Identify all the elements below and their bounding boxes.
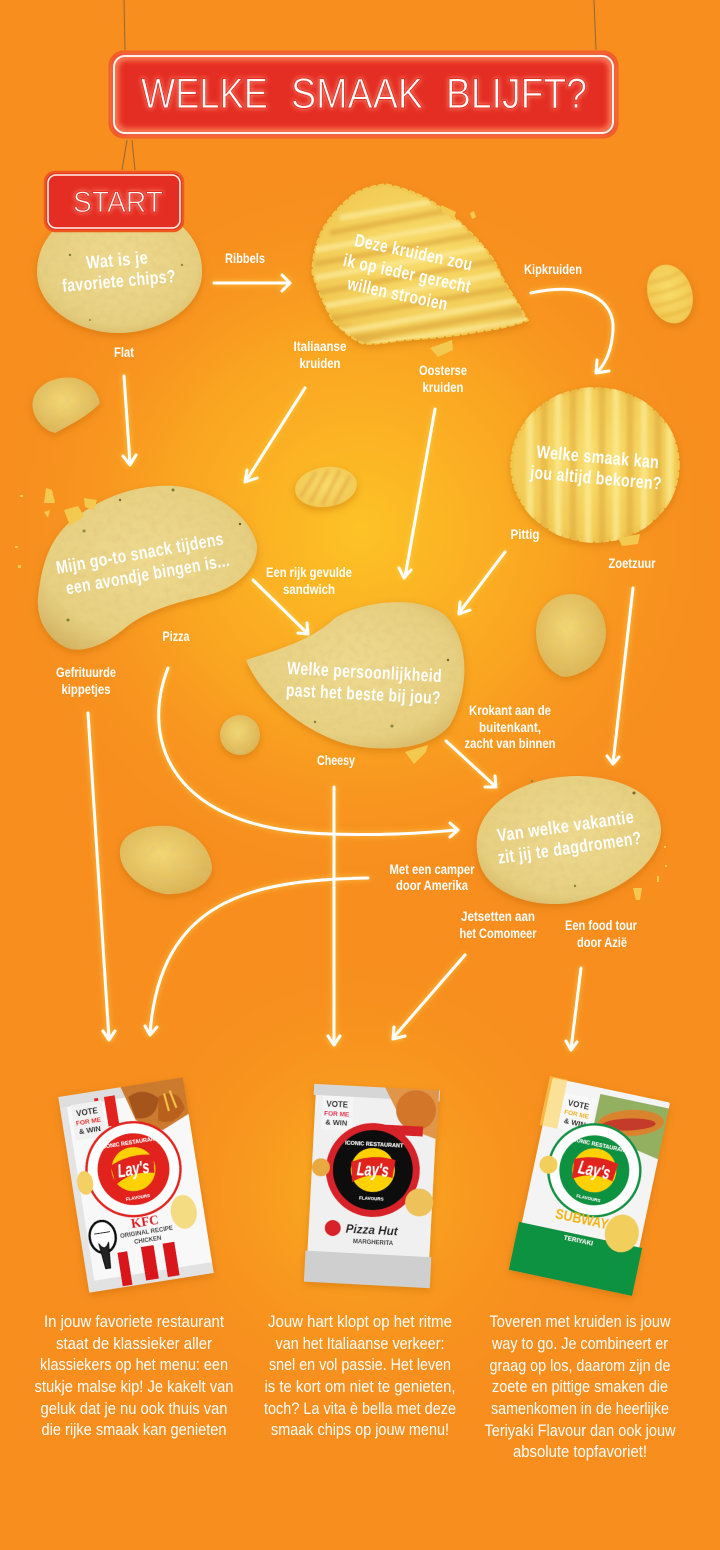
answer labels: Een food tour xyxy=(565,917,637,933)
bag: Pizza Hut: MARGHERITA xyxy=(353,1239,394,1247)
bag: KFC: Lay's xyxy=(116,1157,151,1182)
arrow: camper xyxy=(145,878,368,1035)
bag: Subway: Lay's xyxy=(577,1157,612,1183)
question: herbs: willen strooien xyxy=(345,273,450,314)
arrow: ribbels xyxy=(214,275,290,291)
text: Pizza Hut result: is te kort om niet te genieten, xyxy=(264,1378,456,1396)
start sign xyxy=(45,172,183,231)
answer labels: Pizza xyxy=(162,628,190,644)
bag: KFC: FLAVOURS xyxy=(126,1193,150,1202)
chip: vacation xyxy=(477,776,661,904)
answer labels: Oosterse xyxy=(419,362,467,378)
text: Subway result: way to go. Je combineert er xyxy=(491,1335,668,1353)
bag: KFC: VOTE xyxy=(76,1106,99,1118)
colonel xyxy=(87,1219,118,1255)
bag: Pizza Hut: & WIN xyxy=(325,1117,348,1128)
stripes xyxy=(117,1251,133,1286)
question: vacation: zit jij te dagdromen? xyxy=(496,828,643,868)
answer labels: door Amerika xyxy=(396,877,468,893)
text: Subway result xyxy=(484,1313,676,1461)
text: Pizza Hut result: smaak chips op jouw menu! xyxy=(271,1421,449,1439)
question: ribbed round xyxy=(529,441,665,494)
text: Subway result: Teriyaki Flavour dan ook jouw xyxy=(484,1422,676,1440)
bag: Subway xyxy=(508,1076,673,1299)
arrow: pittig xyxy=(459,552,505,614)
bag: Subway: FOR ME xyxy=(563,1109,590,1121)
bag: KFC: & WIN xyxy=(78,1124,101,1136)
chip: tiny xyxy=(220,715,260,755)
answer labels: Gefrituurde xyxy=(56,664,116,680)
question: personality: Welke persoonlijkheid xyxy=(287,658,442,686)
question: snack xyxy=(54,528,231,599)
answer labels: Italiaanse xyxy=(294,338,347,354)
text: KFC result: staat de klassieker aller xyxy=(56,1335,212,1353)
text: KFC result xyxy=(34,1313,234,1439)
chip: personality xyxy=(246,602,464,748)
answer labels: sandwich xyxy=(283,581,335,597)
arrow: flat xyxy=(123,376,136,465)
answer labels xyxy=(56,250,656,950)
text: KFC result: stukje malse kip! Je kakelt van xyxy=(34,1378,234,1396)
answer labels: Met een camper xyxy=(390,861,475,877)
arrow: food tour xyxy=(566,968,581,1050)
answer labels: door Azië xyxy=(577,934,627,950)
question: start chip xyxy=(59,245,177,296)
bag: Subway: VOTE xyxy=(567,1098,591,1112)
bag: Subway: FLAVOURS xyxy=(576,1193,601,1203)
bag: KFC: FOR ME xyxy=(76,1117,102,1128)
answer labels: het Comomeer xyxy=(460,925,537,941)
sandwich photo xyxy=(590,1094,669,1159)
question: start chip: favoriete chips? xyxy=(61,266,177,296)
text: Pizza Hut result: van het Italiaanse verkeer: xyxy=(276,1335,444,1353)
answer labels: Cheesy xyxy=(317,752,355,768)
KFC brand: KFC xyxy=(130,1213,160,1232)
answer labels: kippetjes xyxy=(62,681,111,697)
arrow: comomeer xyxy=(393,955,465,1039)
arrow: italiaanse xyxy=(245,388,305,482)
chip: ribbed round xyxy=(512,385,678,545)
chip: small ribbed right xyxy=(640,259,700,329)
question: snack: een avondje bingen is... xyxy=(64,550,231,598)
title xyxy=(141,71,587,118)
pizza photo xyxy=(383,1088,439,1139)
text: Pizza Hut result: snel en vol passie. Het leven xyxy=(269,1356,451,1374)
question: personality: past het beste bij jou? xyxy=(286,680,441,708)
hanging wires xyxy=(122,0,596,170)
answer labels: buitenkant, xyxy=(479,719,541,735)
bag: Pizza Hut: FLAVOURS xyxy=(359,1195,384,1202)
text: KFC result: klassiekers op het menu: een xyxy=(40,1356,228,1374)
arrow: kipkruiden xyxy=(531,289,613,373)
chip: small flat left xyxy=(33,377,100,433)
chip: ribbed herbs xyxy=(313,185,535,345)
chip: start xyxy=(37,204,202,333)
crumbs xyxy=(15,205,667,900)
bag: Pizza Hut: ICONIC RESTAURANT xyxy=(345,1141,404,1150)
question: vacation xyxy=(493,806,643,868)
vote box xyxy=(71,1100,102,1128)
question: herbs xyxy=(337,229,477,318)
bag: KFC: CHICKEN xyxy=(134,1236,162,1246)
question: herbs: Deze kruiden zou xyxy=(353,230,474,275)
answer labels: Jetsetten aan xyxy=(461,908,535,924)
question: ribbed round: jou altijd bekoren? xyxy=(529,462,663,494)
answer labels: kruiden xyxy=(300,355,340,371)
title: BLIJFT? xyxy=(446,71,587,118)
text: Subway result: absolute topfavoriet! xyxy=(513,1443,647,1461)
arrow: zoetzuur xyxy=(607,588,633,764)
bag: Pizza Hut: Pizza Hut xyxy=(345,1222,399,1238)
text: KFC result: geluk dat je nu ook thuis van xyxy=(40,1400,228,1418)
arrows xyxy=(88,275,633,1050)
bag: KFC xyxy=(58,1077,214,1293)
answer labels: Flat xyxy=(114,344,134,360)
text: Pizza Hut result xyxy=(264,1313,456,1439)
title: WELKE xyxy=(141,71,268,118)
text: Pizza Hut result: toch? La vita è bella met deze xyxy=(264,1400,456,1418)
answer labels: zacht van binnen xyxy=(464,735,556,751)
arrow: krokant xyxy=(446,741,496,787)
title sign xyxy=(110,52,617,137)
question: vacation: Van welke vakantie xyxy=(496,807,635,846)
answer labels: Ribbels xyxy=(225,250,265,266)
question: start chip: Wat is je xyxy=(85,247,149,273)
question: ribbed round: Welke smaak kan xyxy=(536,442,660,472)
vote box xyxy=(557,1093,596,1134)
text: KFC result: In jouw favoriete restaurant xyxy=(44,1313,224,1331)
bag: Pizza Hut: FOR ME xyxy=(324,1110,350,1119)
Subway brand: SUBWAY xyxy=(554,1205,610,1233)
bag: Subway: TERIYAKI xyxy=(563,1235,594,1248)
arrow: cheesy xyxy=(328,787,340,1045)
answer labels: Een rijk gevulde xyxy=(266,564,352,580)
question: snack: Mijn go-to snack tijdens xyxy=(54,529,225,578)
chip: small right xyxy=(536,594,606,677)
question: personality xyxy=(286,658,442,708)
vote box xyxy=(321,1095,354,1131)
answer labels: Krokant aan de xyxy=(469,702,551,718)
text: Pizza Hut result: Jouw hart klopt op het ritme xyxy=(268,1313,452,1331)
text: Subway result: samenkomen in de heerlijke xyxy=(491,1400,669,1418)
bag: KFC: ORIGINAL RECIPE xyxy=(120,1226,173,1240)
chip: big flat xyxy=(38,486,257,650)
chip: small lower left xyxy=(120,826,212,894)
bag: Subway: & WIN xyxy=(563,1116,587,1129)
bag: Pizza Hut: VOTE xyxy=(326,1100,349,1110)
bag: Subway: ICONIC RESTAURANT xyxy=(570,1137,629,1155)
arrow: rijk gevulde sandwich xyxy=(253,580,308,634)
answer labels: Zoetzuur xyxy=(608,555,656,571)
answer labels: Pittig xyxy=(510,526,540,542)
start label: START xyxy=(73,186,163,219)
Pizza Hut brand xyxy=(324,1220,341,1236)
text: KFC result: die rijke smaak kan genieten xyxy=(42,1421,226,1439)
title: SMAAK xyxy=(291,71,423,118)
arrow: gefrituurde kippetjes xyxy=(88,713,115,1040)
bag: Pizza Hut xyxy=(304,1084,440,1289)
bag: KFC: ICONIC RESTAURANT xyxy=(100,1136,159,1151)
answer labels: Kipkruiden xyxy=(524,261,582,277)
text: Subway result: Toveren met kruiden is jouw xyxy=(490,1313,671,1331)
chips on pack xyxy=(76,1170,94,1195)
question: herbs: ik op ieder gerecht xyxy=(342,250,473,297)
bag: Pizza Hut: Lay's xyxy=(356,1159,389,1181)
chip: small ribbed centre xyxy=(293,463,359,511)
arrow: oosterse xyxy=(399,409,435,578)
answer labels: kruiden xyxy=(422,379,464,395)
arrow: pizza xyxy=(159,668,458,837)
food photo xyxy=(120,1077,188,1130)
text: Subway result: zoete en pittige smaken die xyxy=(492,1378,668,1396)
text: Subway result: graag op los, daarom zijn de xyxy=(490,1357,670,1375)
